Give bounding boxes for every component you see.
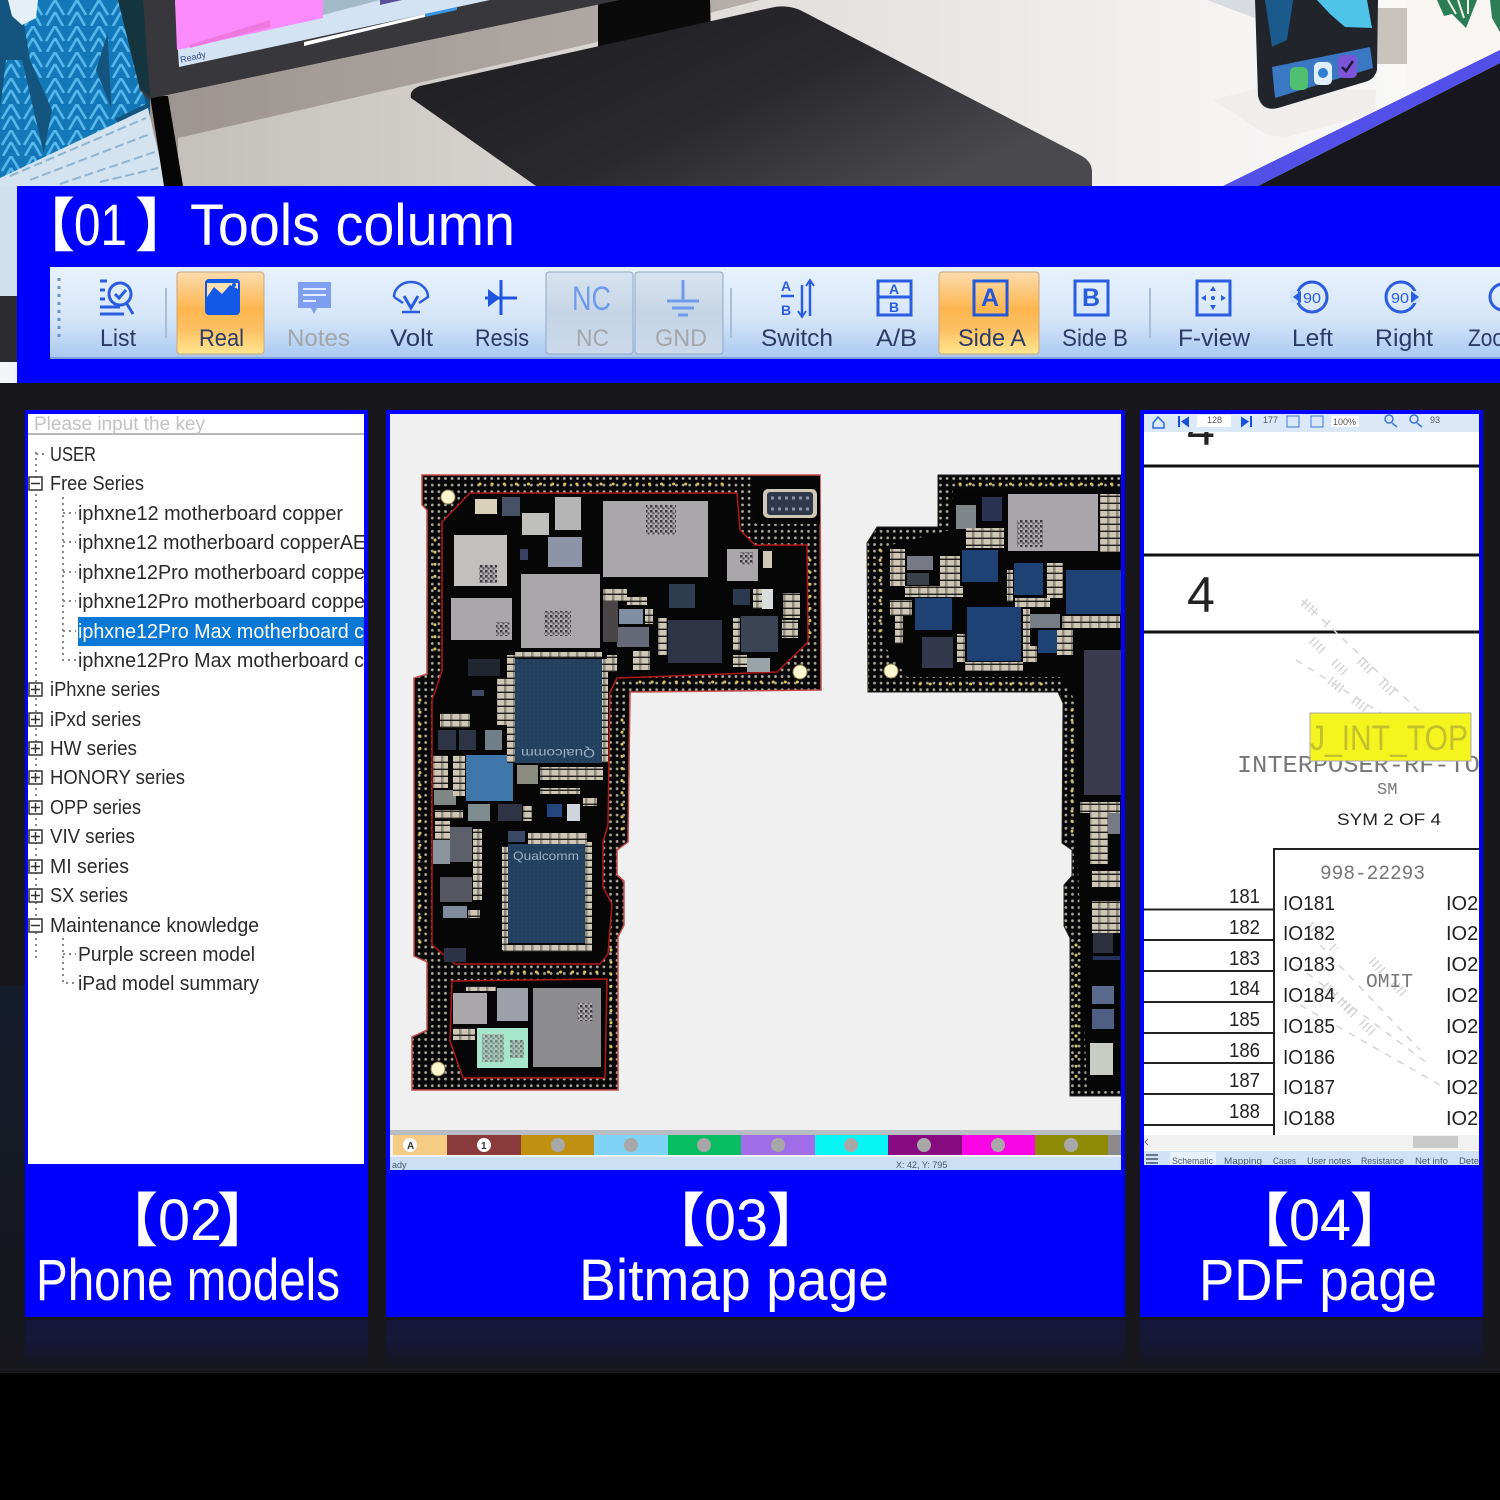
model tree: VIV series: [50, 826, 135, 848]
model tree: Free Series: [50, 473, 144, 495]
board: side B: [867, 475, 1125, 1096]
lower copper zone: [450, 979, 607, 1078]
icon: volt: [394, 282, 428, 312]
model tree: iphxne12 motherboard copper: [78, 503, 343, 525]
part symbol box: [1274, 849, 1479, 1135]
cup logo: [1437, 0, 1500, 32]
icon: zoom: [1490, 284, 1500, 310]
pin numbers: 188: [1229, 1101, 1260, 1123]
icon: ground: [667, 280, 699, 315]
caption: PDF page: 【: [1231, 1189, 1289, 1254]
model tree: USER: [50, 444, 96, 466]
snowy pine wallpaper: [0, 0, 166, 186]
toolbar labels: GND: [655, 325, 707, 352]
model tree: OPP series: [50, 797, 141, 819]
small parts: [472, 497, 520, 696]
monitor base: [411, 6, 1092, 186]
datamatrix codes: [479, 505, 753, 1021]
mounting holes: [431, 490, 807, 1076]
caption: phone models: 【: [100, 1189, 158, 1254]
model tree: iphxne12Pro Max motherboard c: [78, 621, 364, 643]
purple diagonal stripe: [1223, 50, 1500, 186]
coffee cup: [1437, 0, 1500, 32]
toolbar labels: A/B: [876, 325, 917, 352]
search box: Please input the key: [34, 414, 205, 435]
board outline with vias: [412, 475, 821, 1090]
pdf tabs: Schematic: [1172, 1156, 1213, 1166]
yellow via rows: [880, 484, 1120, 1085]
pin names left: IO181: [1283, 893, 1335, 915]
toolbar labels: Switch: [761, 325, 833, 352]
left strip beside tools panel: [0, 186, 17, 383]
pin names left: IO182: [1283, 923, 1335, 945]
icon: rotate right: [1386, 282, 1420, 312]
heading number: 01: [74, 193, 127, 258]
pin names right: IO2: [1446, 1016, 1478, 1038]
pdf tabs: Mapping: [1224, 1156, 1262, 1166]
caption: phone models: 02: [158, 1188, 222, 1253]
pdf tabs: Net info: [1415, 1156, 1448, 1166]
status bar: X: 42, Y: 795: [896, 1160, 947, 1170]
model tree: iphxne12Pro motherboard coppe: [78, 562, 365, 584]
modem chips: Qualcomm: [521, 746, 595, 760]
model tree: Maintenance knowledge: [50, 915, 259, 937]
board: side A: [412, 475, 821, 1090]
reflection: panel 03: [386, 1320, 1125, 1368]
pdf toolbar: 93: [1430, 415, 1440, 425]
colour layer bar: [390, 1130, 1121, 1155]
part name: INTERPOSER-RF-TOP: [1237, 753, 1495, 780]
desk corner dark: [1258, 63, 1500, 186]
pin names left: IO185: [1283, 1016, 1335, 1038]
shield chips: [451, 497, 758, 1067]
hero photo: monitor on desk: [0, 0, 1500, 186]
toolbar labels: Side A: [958, 325, 1026, 352]
pin names right: IO2: [1446, 893, 1478, 915]
pdf toolbar: 100%: [1333, 417, 1356, 427]
icon: A/B: A: [889, 281, 899, 297]
scrollbar: [1144, 1135, 1479, 1150]
pin names right: IO2: [1446, 1047, 1478, 1069]
panel: bitmap page: [386, 410, 1125, 1317]
tree connector lines: [36, 452, 76, 983]
icon: full view: [1197, 281, 1230, 315]
cropped numeral: 4: [1187, 400, 1215, 456]
heading number: 【: [17, 194, 75, 259]
row numeral: 4: [1187, 567, 1215, 623]
wallpaper: [1317, 0, 1372, 28]
capacitor clusters: [433, 589, 800, 1040]
panel: PDF page: [1140, 400, 1495, 1317]
icon: rotate left: [1290, 282, 1327, 312]
caption: PDF page: PDF page: [1199, 1248, 1437, 1313]
caption: bitmap page: 】: [767, 1189, 825, 1254]
caption: bitmap page: 03: [704, 1188, 768, 1253]
schematic sheet: [1144, 400, 1495, 1135]
heading number: 】: [135, 194, 193, 259]
reflection: panel 02: [25, 1320, 368, 1368]
ruled lines: [1144, 466, 1479, 632]
reflection: panel 04: [1140, 1320, 1483, 1368]
status bar: [390, 1157, 1121, 1170]
pin numbers: 183: [1229, 948, 1260, 970]
icon: resistance: [485, 280, 517, 315]
toolbar labels: Left: [1292, 325, 1333, 352]
pdf toolbar: [1144, 414, 1479, 432]
pin names left: IO186: [1283, 1047, 1335, 1069]
model tree: Purple screen model: [78, 944, 255, 966]
toolbar labels: [100, 325, 1500, 352]
icon: switch: B: [781, 302, 791, 318]
model tree: iPhxne series: [50, 679, 160, 701]
icon: list: [100, 281, 133, 314]
toolbar labels: Volt: [390, 325, 433, 352]
monitor stand neck: [598, 0, 711, 46]
caption: bitmap page: [579, 1188, 889, 1313]
icon: side A: A: [981, 284, 999, 312]
heading title: Tools column: [190, 193, 515, 258]
pin names right: IO2: [1446, 954, 1478, 976]
inner copper zone: [432, 493, 808, 964]
icon: side B: B: [1082, 284, 1100, 312]
pin names left: [1283, 893, 1335, 1130]
pin names left: IO187: [1283, 1077, 1335, 1099]
pin numbers: 185: [1229, 1009, 1260, 1031]
pin names right: IO2: [1446, 1077, 1478, 1099]
mint chip: [477, 1028, 528, 1068]
SM: SM: [1377, 781, 1397, 800]
panel: phone models: [25, 410, 368, 1317]
left margin tint: [0, 985, 25, 1373]
toolbar labels: Resis: [475, 325, 529, 352]
OMIT: OMIT: [1366, 971, 1413, 993]
pin names right: IO2: [1446, 923, 1478, 945]
icon: side B: [1075, 281, 1108, 315]
pin names left: IO188: [1283, 1108, 1335, 1130]
capacitor clusters: [890, 494, 1120, 933]
phone stand: [1314, 90, 1376, 130]
model tree: SX series: [50, 885, 128, 907]
panel: tools column: [17, 186, 1500, 383]
board outline with vias: [867, 475, 1125, 1096]
toolbar labels: Side B: [1062, 325, 1128, 352]
monitor bezel: [118, 0, 620, 99]
datamatrix: [1017, 520, 1043, 547]
dock: [1272, 47, 1373, 98]
monitor screen: [175, 0, 490, 67]
toolbar labels: Right: [1375, 325, 1433, 352]
dark chips: [433, 549, 778, 962]
inner zone: [883, 490, 1125, 1089]
monitor side edge: [118, 0, 150, 96]
pin numbers: 186: [1229, 1040, 1260, 1062]
model tree: MI series: [50, 856, 129, 878]
pin names right: IO2: [1446, 985, 1478, 1007]
yellow via rows: [420, 484, 810, 1070]
tree expanders: [29, 477, 42, 932]
pin names left: IO184: [1283, 985, 1335, 1007]
pdf tabs: Cases: [1273, 1156, 1296, 1166]
pdf toolbar: 128: [1207, 415, 1222, 425]
caption: phone models: Phone models: [36, 1248, 340, 1313]
caption: PDF page: 04: [1289, 1188, 1351, 1253]
icon: real: [205, 279, 240, 315]
dark chips: [907, 497, 1121, 1075]
colour layer bar: A: [407, 1141, 414, 1152]
model tree: iphxne12 motherboard copperAE: [78, 532, 366, 554]
heading number: [17, 193, 193, 259]
model tree: iPad model summary: [78, 973, 259, 995]
toolbar labels: Notes: [287, 325, 350, 352]
model tree: HONORY series: [50, 767, 185, 789]
modem chips: Qualcomm: [513, 849, 579, 863]
books behind phone: [1207, 0, 1407, 64]
toolbar labels: List: [100, 325, 136, 352]
model tree: iPxd series: [50, 709, 141, 731]
icon: switch: A: [781, 278, 791, 294]
icon: switch: [781, 278, 814, 318]
blue chips: [915, 550, 1121, 661]
symbol label: SYM 2 OF 4: [1337, 810, 1441, 829]
pin numbers: 187: [1229, 1070, 1260, 1092]
caption: phone models: 】: [217, 1189, 275, 1254]
connector pocket: [752, 476, 820, 524]
shield chip: [1008, 494, 1098, 551]
pdf tabs: [1144, 1151, 1479, 1166]
caption: bitmap page: Bitmap page: [579, 1248, 889, 1313]
pdf tabs: Dete: [1459, 1156, 1479, 1166]
pin numbers: 182: [1229, 917, 1260, 939]
dock icons: [1290, 67, 1308, 90]
toolbar labels: Real: [199, 325, 244, 352]
pin numbers: [1229, 886, 1260, 1123]
pdf toolbar: 177: [1263, 415, 1278, 425]
highlight: J_INT_TOP: [1310, 719, 1468, 758]
caption: phone models: [36, 1188, 340, 1313]
monitor leg: [150, 96, 183, 186]
pdf tabs: User notes: [1307, 1156, 1351, 1166]
icon: side A: [974, 281, 1007, 315]
wall and desk: [120, 0, 1500, 186]
caption: bitmap page: 【: [647, 1189, 705, 1254]
pin names right: IO2: [1446, 1108, 1478, 1130]
caption: PDF page: [1199, 1188, 1437, 1313]
phone: [1255, 0, 1378, 109]
pin numbers: 181: [1229, 886, 1260, 908]
icon: A/B: B: [889, 299, 899, 315]
model tree: iphxne12Pro motherboard coppe: [78, 591, 365, 613]
pin lines: [1144, 910, 1274, 1125]
model tree: HW series: [50, 738, 137, 760]
lower black band: [0, 1373, 1500, 1500]
icon: NC text: NC: [572, 280, 611, 318]
icon: notes: [298, 282, 331, 314]
selected row highlight: [78, 617, 364, 646]
colour layer bar: 1: [481, 1141, 487, 1152]
caption: PDF page: 】: [1350, 1189, 1408, 1254]
pdf tabs: Resistance: [1361, 1156, 1404, 1166]
status text: Ready: [179, 49, 207, 65]
pin numbers: 184: [1229, 978, 1260, 1000]
active and disabled buttons: [177, 272, 1039, 354]
part number: 998-22293: [1320, 863, 1425, 886]
model tree: [50, 444, 366, 995]
toolbar: [50, 267, 1500, 359]
toolbar labels: F-view: [1178, 325, 1251, 352]
icon: rotate left: 90: [1303, 290, 1321, 307]
icon: rotate right: 90: [1391, 290, 1409, 307]
modem chips: [466, 659, 602, 943]
status bar: ady: [392, 1160, 407, 1170]
pin names right: [1446, 893, 1478, 1130]
toolbar labels: NC: [576, 325, 609, 352]
icon: A/B: [878, 281, 911, 315]
hatch marks: [1296, 600, 1440, 1085]
model tree: iphxne12Pro Max motherboard c: [78, 650, 364, 672]
pin names left: IO183: [1283, 954, 1335, 976]
mounting hole: [884, 664, 898, 678]
connector: [763, 489, 817, 518]
